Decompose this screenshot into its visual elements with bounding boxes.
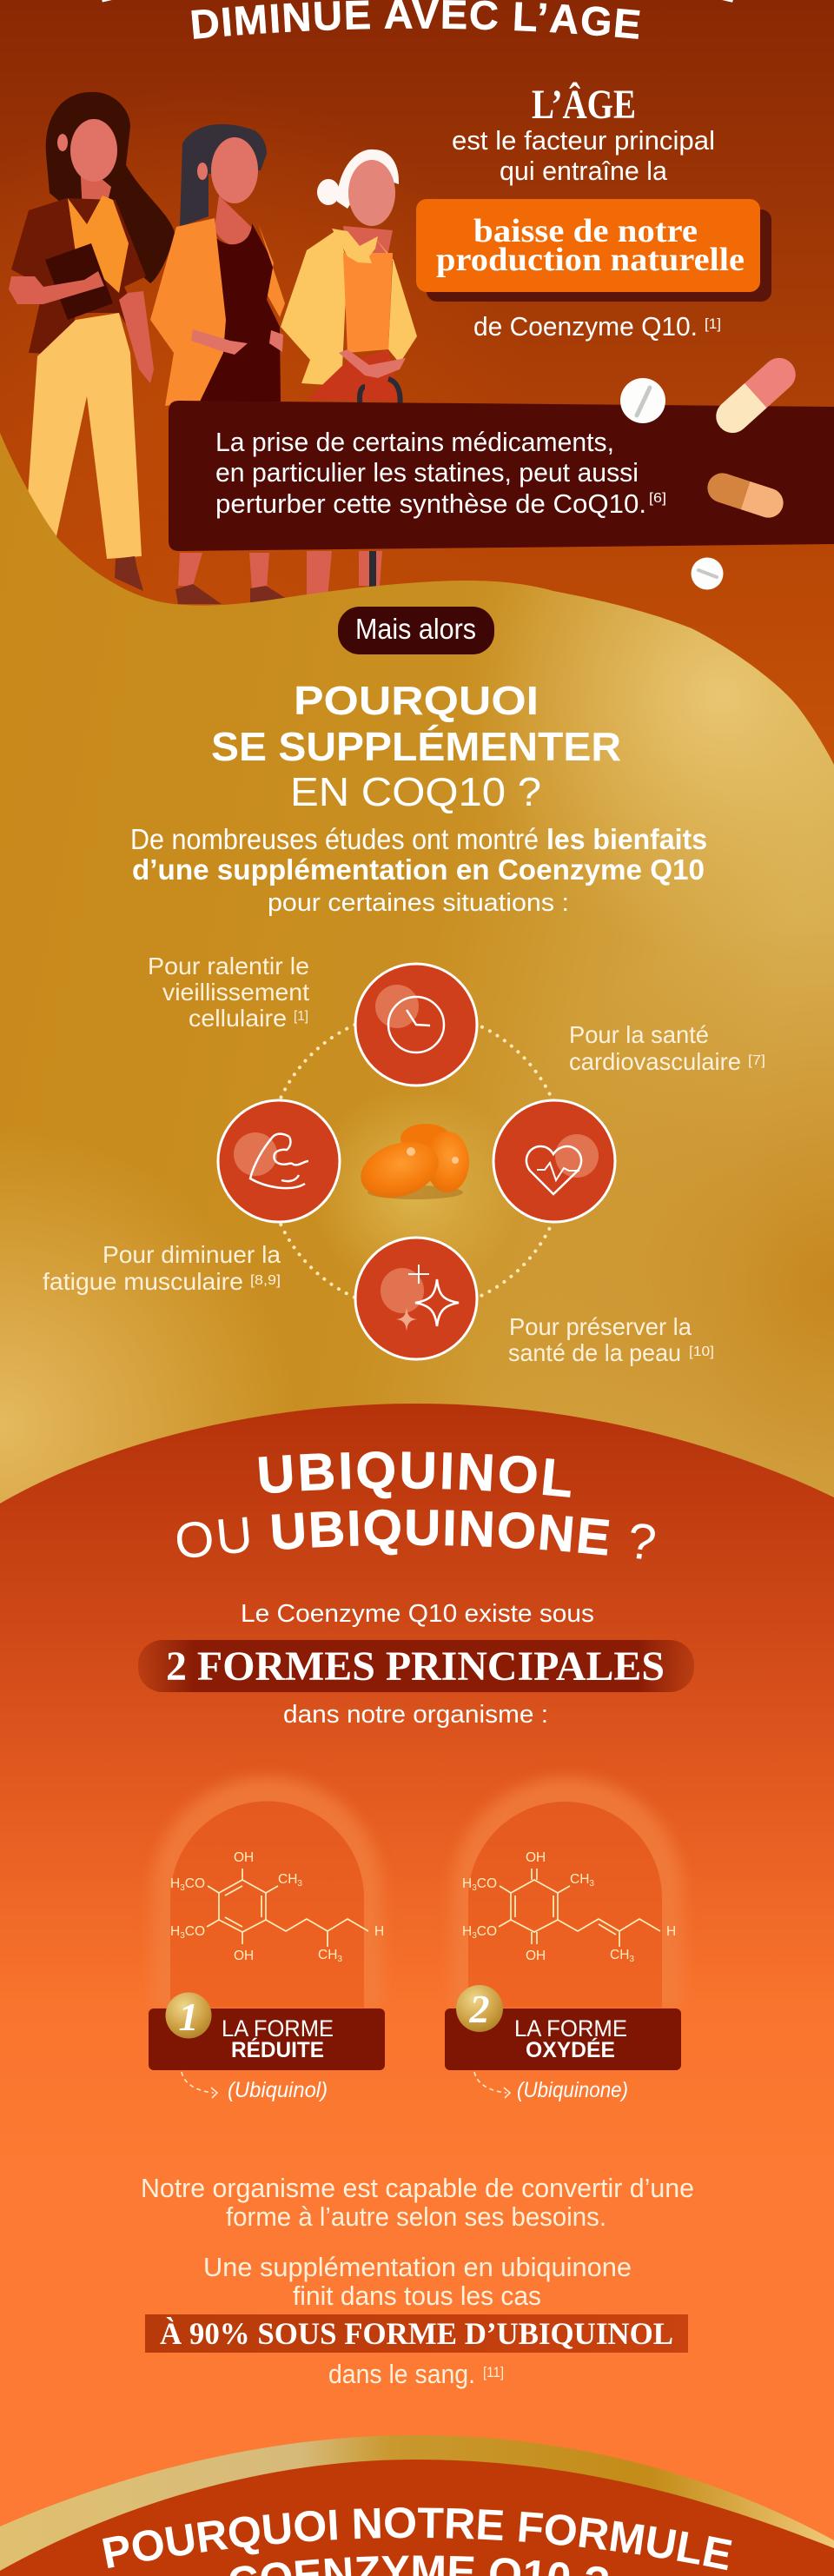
badge: number 1: 1 bbox=[179, 1995, 198, 2039]
chart: ubiquinone molecule: H bbox=[666, 1924, 676, 1939]
text block: conversion: Une supplémentation en ubiquinone bbox=[203, 2252, 632, 2282]
text block: in the blood: [11] bbox=[483, 2364, 504, 2380]
chart: ubiquinol molecule: CH bbox=[318, 1948, 337, 1962]
label: skin health: Pour préserver la bbox=[509, 1313, 692, 1340]
text block: age is the main factor: est le facteur principal bbox=[452, 125, 715, 156]
chart: ubiquinol molecule: H bbox=[374, 1924, 384, 1939]
text block: conversion bbox=[141, 2173, 694, 2311]
chart: ubiquinol molecule: H bbox=[170, 1924, 180, 1939]
text block: studies intro: De nombreuses études ont montré bbox=[130, 823, 539, 855]
chart: ubiquinol molecule: 3 bbox=[180, 1931, 185, 1941]
heading: ubiquinol or ubiquinone bbox=[177, 1451, 655, 1559]
illustration: three women bbox=[9, 92, 417, 605]
text block: in the blood: dans le sang. bbox=[328, 2359, 475, 2389]
chart: ubiquinol molecule: 3 bbox=[297, 1879, 302, 1889]
label box bbox=[445, 2008, 681, 2070]
label: cardiovascular health bbox=[569, 1021, 765, 1075]
woman 1 bbox=[9, 92, 175, 591]
label box: LA FORME bbox=[222, 2015, 334, 2042]
chart: ubiquinone molecule: CH bbox=[570, 1872, 589, 1887]
icon: softgel capsules bbox=[354, 1124, 469, 1207]
icon: heart bbox=[493, 1100, 615, 1222]
chart: ubiquinol molecule: CO bbox=[185, 1924, 205, 1939]
icon: orange capsule bbox=[704, 469, 787, 521]
text block: in our body: dans notre organisme : bbox=[283, 1701, 548, 1729]
text block: of Coenzyme Q10: [1] bbox=[705, 315, 721, 332]
text block: conversion: finit dans tous les cas bbox=[293, 2281, 541, 2311]
text block: conversion: Notre organisme est capable de convertir d’une bbox=[141, 2173, 694, 2203]
callout text: perturber cette synthèse de CoQ10. bbox=[215, 488, 646, 519]
chart: ubiquinol molecule bbox=[170, 1850, 384, 1964]
arrow to ubiquinol bbox=[182, 2072, 217, 2098]
chart: ubiquinol molecule: OH bbox=[234, 1850, 254, 1865]
chart: ubiquinol molecule: OH bbox=[234, 1949, 254, 1963]
text block: age is the main factor: L’ÂGE bbox=[532, 81, 636, 128]
label box: OXYDÉE bbox=[526, 2037, 615, 2062]
badge: number 2 bbox=[456, 1985, 503, 2032]
label: slow cell ageing: [1] bbox=[294, 1009, 308, 1024]
label: muscle fatigue bbox=[43, 1241, 281, 1295]
text block: studies intro: pour certaines situations : bbox=[268, 889, 569, 917]
label: slow cell ageing: Pour ralentir le bbox=[148, 953, 309, 979]
callout: natural production decline: baisse de notre bbox=[473, 213, 698, 249]
icon: clock bbox=[355, 964, 477, 1086]
panel: oxidised form bbox=[445, 1777, 683, 2102]
chart: ubiquinol molecule: 3 bbox=[180, 1883, 185, 1893]
icon: pills bbox=[620, 351, 803, 521]
chart: ubiquinone molecule: CO bbox=[477, 1924, 497, 1939]
label: skin health bbox=[508, 1313, 714, 1366]
chart: ubiquinone molecule: 3 bbox=[472, 1931, 477, 1941]
chart: ubiquinol molecule: CO bbox=[185, 1876, 205, 1891]
callout text: La prise de certains médicaments, bbox=[215, 427, 614, 457]
heading: why supplement: POURQUOI bbox=[294, 678, 539, 723]
heading: why supplement: SE SUPPLÉMENTER bbox=[211, 724, 621, 769]
label: muscle fatigue: Pour diminuer la bbox=[103, 1241, 281, 1268]
panel: age section background bbox=[0, 0, 834, 782]
badge: 2 main forms: 2 FORMES PRINCIPALES bbox=[166, 1643, 665, 1690]
label: cardiovascular health: cardiovasculaire bbox=[569, 1048, 741, 1075]
text block: studies intro: d’une supplémentation en Coenzyme Q10 bbox=[132, 853, 705, 886]
text block: conversion: forme à l’autre selon ses besoins. bbox=[226, 2201, 606, 2232]
chart: ubiquinone molecule bbox=[462, 1850, 676, 1964]
text block: studies intro bbox=[130, 823, 707, 917]
callout: natural production decline: production naturelle bbox=[436, 242, 745, 278]
label box: LA FORME bbox=[514, 2015, 627, 2042]
icon: small tablet bbox=[692, 558, 723, 589]
label: skin health: [10] bbox=[689, 1344, 714, 1359]
chart: ubiquinone molecule: H bbox=[462, 1924, 472, 1939]
arrow to ubiquinone bbox=[474, 2072, 510, 2098]
label: slow cell ageing: cellulaire bbox=[189, 1005, 287, 1032]
label box: RÉDUITE bbox=[231, 2037, 324, 2062]
text block: of Coenzyme Q10: de Coenzyme Q10. bbox=[473, 311, 698, 342]
chart: ubiquinone molecule: CH bbox=[610, 1948, 629, 1962]
chart: ubiquinone molecule: OH bbox=[526, 1850, 546, 1865]
chart: ubiquinone molecule: 3 bbox=[472, 1883, 477, 1893]
text block: studies intro: les bienfaits bbox=[546, 823, 707, 855]
label box bbox=[149, 2008, 385, 2070]
chart: ubiquinone molecule: CO bbox=[477, 1876, 497, 1891]
label: muscle fatigue: [8,9] bbox=[250, 1273, 281, 1288]
label: slow cell ageing: vieillissement bbox=[162, 979, 309, 1006]
chart: ubiquinone molecule: OH bbox=[526, 1949, 546, 1963]
panel: ubiquinol section background bbox=[0, 1404, 834, 2576]
badge: number 2: 2 bbox=[469, 1987, 490, 2031]
chart: ubiquinol molecule: 3 bbox=[337, 1955, 342, 1964]
panel: formula section with gold band bbox=[0, 2435, 834, 2576]
text block: age is the main factor bbox=[452, 81, 715, 186]
text block: exists in: Le Coenzyme Q10 existe sous bbox=[241, 1600, 594, 1628]
label: ubiquinone: (Ubiquinone) bbox=[517, 2078, 628, 2102]
callout text bbox=[215, 427, 666, 519]
heading: ubiquinol or ubiquinone: OU UBIQUINONE ? bbox=[177, 1509, 655, 1559]
heading: why supplement: EN COQ10 ? bbox=[290, 769, 541, 814]
panel: medication callout bbox=[169, 401, 834, 551]
chart: ubiquinol molecule: CH bbox=[278, 1872, 297, 1887]
callout: natural production decline bbox=[416, 199, 771, 302]
badge: mais alors bbox=[338, 607, 494, 654]
panel: gold section background bbox=[0, 433, 834, 1530]
label: slow cell ageing bbox=[148, 953, 309, 1032]
woman 3 bbox=[281, 149, 417, 598]
callout: 90 percent as ubiquinol: À 90% SOUS FORME D’UBIQUINOL bbox=[160, 2316, 673, 2351]
woman 2 bbox=[150, 124, 291, 605]
icon: white tablet bbox=[620, 378, 665, 423]
badge: mais alors: Mais alors bbox=[355, 613, 476, 645]
icon: skin sparkles bbox=[355, 1238, 477, 1359]
text block: age is the main factor: qui entraîne la bbox=[500, 156, 668, 186]
icon: muscle bbox=[218, 1100, 340, 1222]
label: muscle fatigue: fatigue musculaire bbox=[43, 1268, 243, 1295]
callout text: [6] bbox=[649, 491, 666, 506]
heading: why supplement bbox=[211, 678, 621, 814]
badge: number 1 bbox=[165, 1992, 212, 2039]
callout text: en particulier les statines, peut aussi bbox=[215, 457, 639, 488]
label: ubiquinol: (Ubiquinol) bbox=[228, 2078, 328, 2102]
heading: ubiquinol or ubiquinone: UBIQUINOL bbox=[259, 1451, 571, 1498]
chart: ubiquinone molecule: 3 bbox=[629, 1955, 634, 1964]
chart: benefits ring bbox=[218, 964, 615, 1359]
chart: ubiquinol molecule: H bbox=[170, 1876, 180, 1891]
label: cardiovascular health: [7] bbox=[748, 1053, 765, 1068]
label: cardiovascular health: Pour la santé bbox=[569, 1021, 709, 1048]
chart: ubiquinone molecule: H bbox=[462, 1876, 472, 1891]
panel: reduced form bbox=[149, 1776, 385, 2102]
icon: pink and cream capsule bbox=[709, 351, 803, 440]
heading: top arched title bbox=[102, 0, 733, 39]
label: skin health: santé de la peau bbox=[508, 1339, 681, 1366]
chart: ubiquinone molecule: 3 bbox=[589, 1879, 594, 1889]
